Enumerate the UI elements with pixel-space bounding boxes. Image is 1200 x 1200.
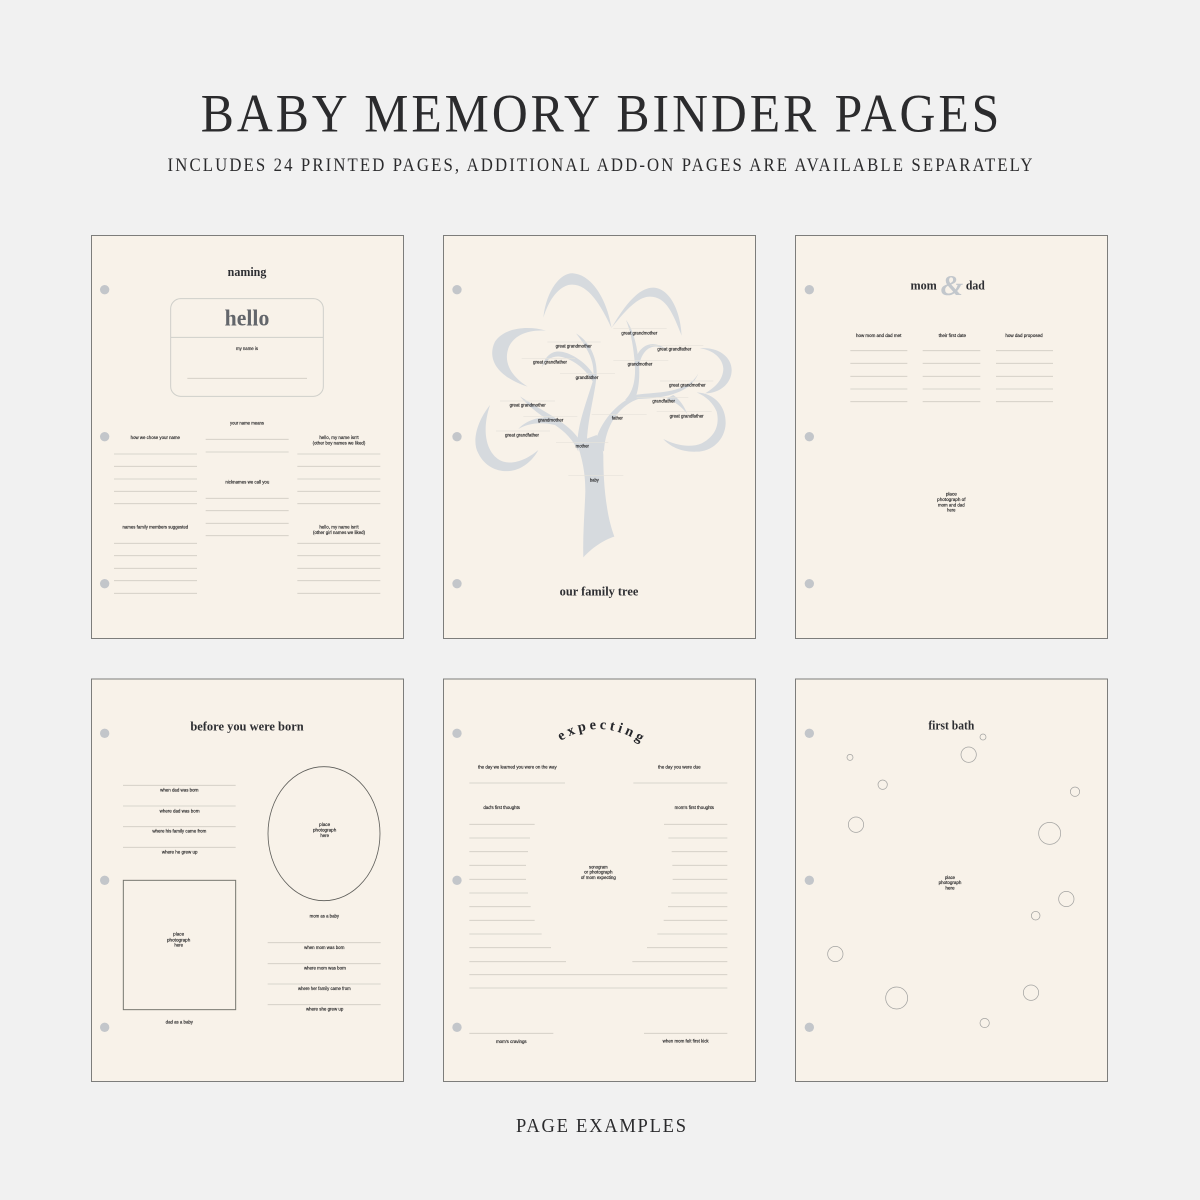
mom details: where she grew up (306, 1007, 344, 1012)
field labels: mom's first thoughts (675, 805, 715, 810)
photo placeholder text (581, 864, 616, 880)
mom details: where mom was born (304, 966, 346, 971)
field labels (478, 764, 715, 1044)
photo placeholder text: place (945, 875, 955, 880)
writing lines (850, 351, 1053, 402)
heading: mom and dad: mom (910, 278, 937, 292)
family tree illustration (475, 273, 732, 557)
field labels: names family members suggested (122, 524, 189, 529)
photo placeholder text (939, 875, 962, 890)
panel: expecting page (443, 678, 756, 1082)
field labels: (other girl names we liked) (313, 530, 366, 535)
photo placeholder text: photograph of (937, 497, 966, 502)
field labels: dad's first thoughts (483, 805, 521, 810)
tree labels: great grandmother (556, 343, 592, 348)
writing lines (469, 783, 727, 1033)
field labels: (other boy names we liked) (313, 441, 366, 446)
tree labels: grandmother (628, 362, 653, 367)
field labels: the day you were due (658, 764, 701, 769)
field labels: their first date (939, 333, 966, 338)
dad photo frame: here (174, 943, 183, 948)
field labels: how mom and dad met (856, 333, 902, 338)
photo placeholder text: here (947, 508, 956, 513)
tree labels: baby (590, 477, 599, 482)
tree labels: great grandfather (670, 413, 704, 418)
panel: first bath page (796, 679, 1108, 1082)
field labels (856, 333, 1043, 338)
photo placeholder text: place (946, 492, 957, 497)
tree labels: great grandmother (621, 331, 658, 336)
tree name lines (496, 328, 713, 476)
tree labels: great grandmother (510, 402, 546, 407)
field labels: hello, my name isn't (319, 435, 359, 440)
field labels: your name means (230, 421, 265, 426)
punch holes (100, 285, 109, 588)
tree labels: father (612, 415, 623, 420)
footer caption: PAGE EXAMPLES (516, 1116, 686, 1137)
title: BABY MEMORY BINDER PAGES (201, 85, 999, 144)
field labels: how dad proposed (1005, 333, 1043, 338)
field labels (122, 421, 366, 535)
panel: family tree page (444, 236, 756, 638)
heading: mom and dad: & (941, 271, 964, 302)
field labels: mom's cravings (496, 1039, 527, 1044)
name tag card (171, 299, 323, 396)
tree labels (505, 331, 706, 482)
photo placeholder text: sonogram (589, 864, 608, 869)
tree labels: grandfather (576, 375, 599, 380)
tree labels: great grandfather (533, 359, 567, 364)
heading: first bath: first bath (928, 718, 974, 732)
photo placeholder text: of mom expecting (581, 875, 616, 880)
heading: our family tree: our family tree (560, 585, 639, 599)
mom details (268, 943, 381, 1012)
heading: mom and dad: dad (966, 278, 985, 292)
dad details: where his family came from (152, 829, 206, 834)
dad details: where dad was born (160, 808, 200, 813)
photo placeholder text: mom and dad (938, 502, 965, 507)
punch holes (805, 285, 814, 588)
dad photo frame: dad as a baby (166, 1019, 194, 1024)
dad details: where he grew up (162, 849, 198, 854)
field labels: hello, my name isn't (319, 524, 359, 529)
heading: mom and dad (910, 271, 985, 302)
field labels: when mom felt first kick (663, 1039, 709, 1044)
punch holes (452, 285, 462, 588)
name tag card: my name is (236, 346, 259, 351)
punch holes (452, 729, 462, 1032)
field labels: nicknames we call you (225, 479, 270, 484)
bubbles (828, 734, 1080, 1028)
subtitle: INCLUDES 24 PRINTED PAGES, ADDITIONAL ADD-ON PAGES ARE AVAILABLE SEPARATELY (168, 154, 1033, 175)
dad photo frame: place (173, 932, 185, 937)
tree labels: great grandfather (657, 346, 692, 351)
name tag card: hello (225, 306, 269, 332)
tree labels: grandmother (538, 417, 564, 422)
panel: before you were born page (92, 679, 404, 1082)
photo placeholder text: here (945, 885, 955, 890)
photo placeholder text (937, 492, 966, 513)
mom details: when mom was born (304, 945, 345, 950)
tree labels: mother (576, 444, 589, 449)
punch holes (100, 729, 109, 1032)
panel: mom and dad page (796, 236, 1108, 638)
mom photo oval: place (319, 822, 331, 827)
dad photo frame (123, 880, 236, 1024)
panel: naming page (92, 236, 404, 638)
photo placeholder text: or photograph (584, 870, 613, 875)
punch holes (805, 729, 814, 1032)
curved heading: expecting: expecting (558, 722, 644, 744)
dad details (123, 785, 236, 854)
heading: before you were born: before you were born (190, 720, 304, 734)
mom photo oval: here (320, 833, 329, 838)
tree labels: great grandmother (669, 383, 706, 388)
mom photo oval (268, 767, 380, 918)
mom details: where her family came from (298, 986, 351, 991)
field labels: how we chose your name (131, 435, 180, 440)
photo placeholder text: photograph (939, 880, 962, 885)
tree labels: grandfather (652, 398, 675, 403)
dad details: when dad was born (160, 788, 199, 793)
field labels: the day we learned you were on the way (478, 764, 557, 769)
tree labels: great grandfather (505, 432, 539, 437)
dad photo frame: photograph (167, 937, 191, 942)
mom photo oval: photograph (313, 828, 337, 833)
heading: naming: naming (228, 265, 267, 279)
writing lines (114, 439, 380, 593)
mom photo oval: mom as a baby (310, 913, 340, 918)
